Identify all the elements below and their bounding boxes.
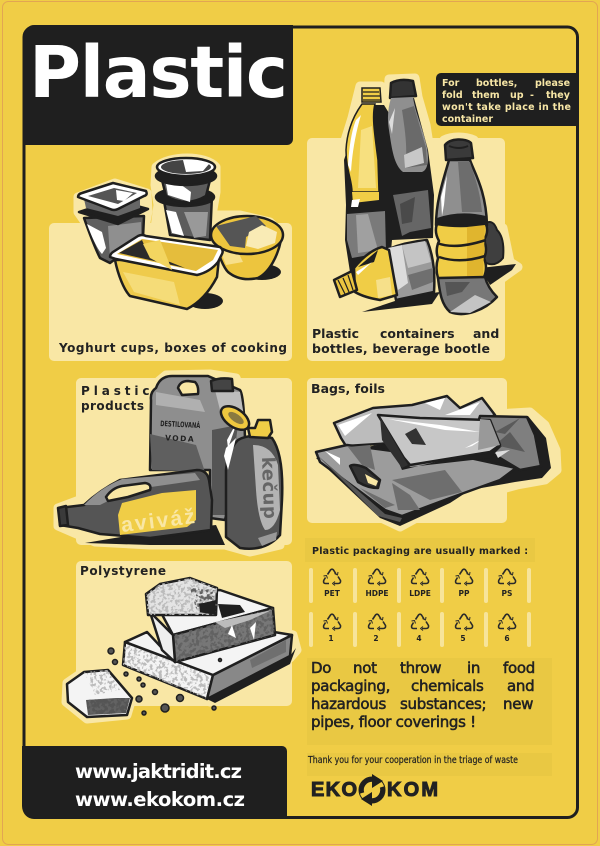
middle block [150, 590, 273, 635]
warning text: and [507, 677, 534, 695]
panel background [307, 138, 505, 361]
icon: LDPE: LDPE [409, 589, 431, 598]
clear bottle [436, 139, 497, 314]
heading: Plastic [81, 384, 153, 398]
warning text: Do [311, 659, 331, 677]
dark mass behind bottles [344, 98, 434, 272]
title block [25, 25, 293, 145]
icon: 4: 4 [416, 634, 422, 643]
ketchup bottle [217, 401, 282, 549]
icon: PS: PS [502, 589, 512, 598]
top piece [146, 578, 217, 615]
top right bag [470, 416, 541, 470]
caption line 2: bottles, beverage bootle [312, 341, 490, 356]
lower bag [316, 445, 516, 516]
illustration: polystyrene blocks [66, 577, 297, 719]
panel: polystyrene [66, 561, 297, 719]
web addresses block [22, 746, 287, 818]
warning text: food [503, 659, 535, 677]
icon: 1: 1 [328, 634, 334, 643]
icon: 4 [412, 614, 429, 643]
warning text: hazardous [311, 695, 386, 713]
icon: 1 [324, 614, 341, 643]
logo word left: EKO [311, 779, 357, 801]
callout text: bottles, [476, 78, 517, 89]
icon: PET [324, 569, 341, 598]
callout text: them [472, 90, 500, 101]
callout: fold bottles [436, 73, 578, 126]
crumbs [108, 648, 222, 715]
icon: 2: 2 [373, 634, 379, 643]
heading line 2: products [81, 399, 144, 413]
thanks text: Thank you for your cooperation in the triage of waste [307, 755, 518, 766]
ground shadows [362, 292, 440, 312]
marks heading strip [305, 538, 535, 562]
chunk [67, 670, 132, 717]
title: Plastic [29, 31, 288, 114]
softener label: aviváž [120, 505, 196, 537]
warning text: throw [400, 659, 441, 677]
illustration: bottles [333, 78, 518, 316]
canister label line 2: VODA [165, 433, 195, 444]
logo word right: KOM [387, 779, 438, 801]
ketchup label: kečup [257, 456, 280, 519]
callout background [436, 73, 578, 126]
logo: EKOKOM [311, 774, 438, 806]
marks heading: Plastic packaging are usually marked : [312, 546, 528, 557]
top front bag [378, 415, 502, 470]
dark lumps behind [484, 222, 503, 264]
warning text: not [353, 659, 377, 677]
thanks background [307, 753, 552, 776]
icon: PET: PET [324, 589, 341, 598]
lying bottle [334, 240, 434, 300]
caption: Plastic [312, 326, 359, 341]
callout text: For [442, 78, 460, 89]
callout text: up [510, 90, 524, 101]
icon: 5 [456, 614, 473, 643]
shadows [187, 293, 223, 309]
callout text: fold [442, 90, 463, 101]
warning text: new [503, 695, 533, 713]
url 1: www.jaktridit.cz [75, 760, 242, 783]
panel background [76, 561, 292, 706]
icon: HDPE: HDPE [365, 589, 389, 598]
right bowl [215, 240, 281, 279]
warning text: substances; [400, 695, 486, 713]
warning background [307, 658, 552, 745]
distilled water canister [150, 376, 245, 520]
icon: PP: PP [458, 589, 470, 598]
front box [115, 258, 219, 309]
softener bottle [58, 470, 225, 545]
icon: 2 [368, 614, 386, 643]
callout text: won't take place in the [442, 102, 571, 113]
callout text: they [546, 90, 571, 101]
panel: yoghurt cups [49, 158, 292, 361]
warning text: in [467, 659, 480, 677]
right shadow [316, 416, 551, 526]
canister label: DESTILOVANÁ [160, 419, 201, 430]
caption: Yoghurt cups, boxes of cooking [58, 341, 287, 355]
heading: Polystyrene [80, 564, 166, 578]
caption: containers [380, 326, 455, 341]
back bag [334, 396, 495, 446]
warning text: packaging, [311, 677, 390, 695]
thanks strip [307, 753, 552, 776]
right cup stack [163, 195, 212, 240]
block background [22, 746, 287, 818]
panel: bottles [307, 78, 518, 361]
illustration: canisters and ketchup [58, 374, 284, 552]
heading: Bags, foils [311, 381, 385, 396]
illustration: cups and boxes [78, 158, 283, 309]
icon: 6: 6 [504, 634, 510, 643]
dark bottle [388, 80, 431, 236]
icon: HDPE [365, 569, 389, 598]
icon: 6 [498, 614, 516, 643]
illustration: bags and foils [315, 395, 557, 527]
icon: 5: 5 [460, 634, 466, 643]
warning block [307, 658, 552, 745]
caption: and [473, 326, 499, 341]
title background [25, 25, 293, 145]
yellow bottle [346, 88, 386, 258]
panel: recycling marks [305, 538, 535, 647]
callout text: please [535, 78, 570, 89]
bottom block [123, 642, 213, 699]
panel: bags [307, 378, 557, 527]
panel: plastic products [58, 374, 292, 552]
warning text: chemicals [411, 677, 484, 695]
panel background [307, 378, 507, 523]
url 2: www.ekokom.cz [75, 788, 245, 811]
callout text: - [530, 90, 534, 101]
icon: PS [498, 569, 516, 598]
panel background [49, 223, 292, 361]
icon: PP [456, 569, 473, 598]
callout text: container [442, 114, 493, 125]
logo recycling circle [359, 774, 385, 806]
panel background [76, 378, 292, 545]
icon: LDPE [409, 569, 431, 598]
left cup stack [84, 216, 144, 263]
warning text: pipes, floor coverings ! [311, 713, 476, 731]
